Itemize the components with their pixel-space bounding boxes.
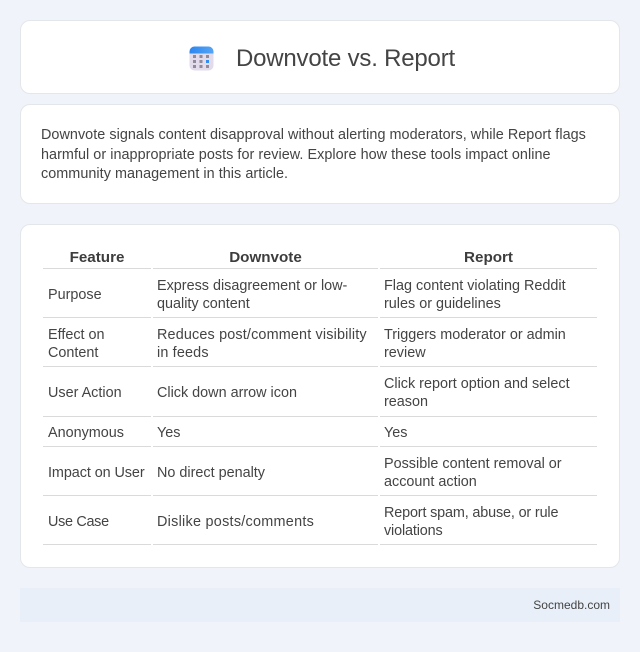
row: Effect on Content: Content — [48, 345, 98, 361]
table header: Downvote: Downvote — [229, 249, 302, 266]
intro paragraph: Downvote signals content disapproval without alerting moderators, while Report flags — [41, 127, 586, 143]
intro paragraph: harmful or inappropriate posts for review. Explore how these tools impact online — [41, 146, 551, 162]
intro paragraph — [41, 127, 586, 182]
text: rules or guidelines — [384, 296, 501, 312]
text: Yes — [157, 425, 180, 441]
row: Effect on Content: Effect on — [48, 327, 105, 343]
text: review — [384, 345, 426, 361]
text: violations — [384, 523, 442, 539]
text: Click report option and select — [384, 376, 570, 392]
text: account action — [384, 474, 477, 490]
text: reason — [384, 394, 428, 410]
text: Dislike posts/comments — [157, 514, 314, 530]
footer bar — [20, 588, 620, 622]
row: Effect on Content — [48, 327, 105, 361]
footer credit: Socmedb.com — [533, 598, 610, 612]
icon: calendar — [190, 46, 214, 70]
row: Anonymous: Anonymous — [48, 425, 124, 441]
row: Use Case: Use Case — [48, 514, 109, 530]
text: Click down arrow icon — [157, 385, 297, 401]
text: Express disagreement or low- — [157, 278, 347, 294]
row: User Action: User Action — [48, 385, 122, 401]
text: Triggers moderator or admin — [384, 327, 566, 343]
text: Reduces post/comment visibility — [157, 327, 367, 343]
text: Possible content removal or — [384, 456, 562, 472]
title: Downvote vs. Report — [236, 45, 455, 72]
text: Flag content violating Reddit — [384, 278, 566, 294]
row: Impact on User: Impact on User — [48, 465, 145, 481]
table header: Feature: Feature — [70, 249, 124, 266]
text: Report spam, abuse, or rule — [384, 505, 558, 521]
row: Purpose: Purpose — [48, 287, 102, 303]
text: Yes — [384, 425, 407, 441]
table header: Report: Report — [464, 249, 513, 266]
panel: comparison table — [20, 224, 620, 568]
text: in feeds — [157, 345, 209, 361]
text: quality content — [157, 296, 250, 312]
panel: title card — [20, 20, 620, 94]
text: No direct penalty — [157, 465, 265, 481]
intro paragraph: community management in this article. — [41, 166, 288, 182]
panel: intro text — [20, 104, 620, 204]
